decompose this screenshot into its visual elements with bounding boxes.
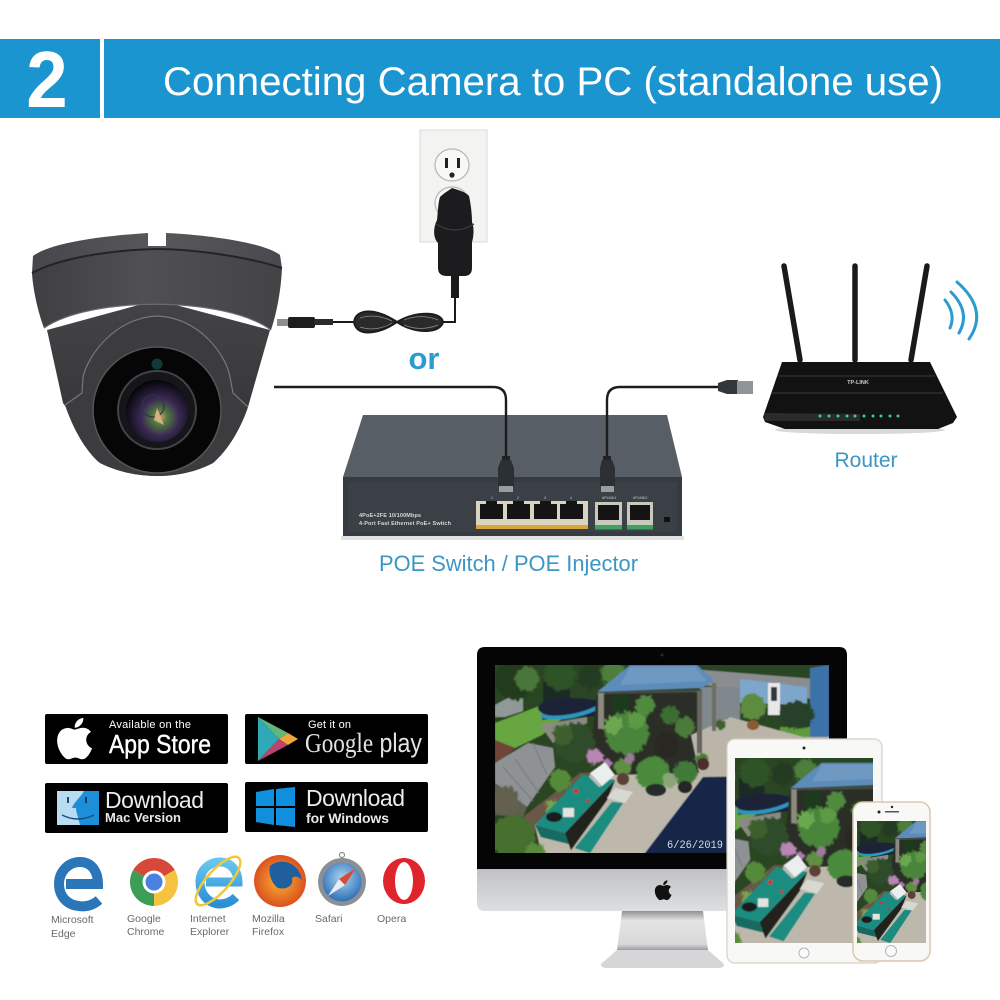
network cable to router: [600, 380, 753, 492]
status LEDs: [818, 414, 900, 418]
browser: Internet Explorer: Explorer: [190, 926, 230, 938]
badge: App Store: [45, 714, 228, 764]
browser: Safari: [315, 852, 366, 925]
title banner: [104, 39, 1000, 118]
browser: Opera: Opera: [377, 913, 406, 925]
browser: Opera: [377, 858, 425, 925]
network cable to camera: [274, 387, 514, 492]
phone screen: camera view: [857, 821, 926, 943]
browser: Internet Explorer: Internet: [190, 913, 226, 925]
badge: Download for Windows: [245, 782, 428, 832]
ethernet ports: UPLINK1: [602, 496, 616, 500]
tablet screen: camera view: [735, 758, 873, 943]
date stamp: 6/26/2019: [667, 840, 723, 852]
browser: Internet Explorer: [189, 851, 247, 938]
browser: Microsoft Edge: Edge: [51, 928, 76, 940]
dome camera: [32, 233, 282, 476]
browser: Microsoft Edge: [51, 862, 99, 940]
badge: Download Mac Version: [45, 783, 228, 833]
browser: Google Chrome: Chrome: [127, 926, 165, 938]
badge: App Store: App Store: [109, 729, 211, 759]
wall outlet: [420, 130, 487, 242]
router: TP-LINK: [847, 380, 869, 386]
POE switch: [341, 415, 684, 540]
icon: windows: [256, 787, 295, 827]
browser: Microsoft Edge: Microsoft: [51, 914, 94, 926]
switch label text: 4PoE+2FE 10/100Mbps: [359, 513, 421, 519]
badge: Google Play: Get it on: [308, 719, 351, 731]
browser: Google Chrome: Google: [127, 913, 161, 925]
power adapter and cable: [277, 188, 474, 332]
router: [763, 266, 957, 434]
tablet: [688, 739, 1000, 963]
header bar: [0, 36, 1000, 125]
POE label: POE Switch / POE Injector: [379, 551, 638, 576]
browser: Google Chrome: [127, 858, 178, 938]
badge: Download for Windows: Download: [306, 785, 405, 811]
badge: Download for Windows: for Windows: [306, 810, 389, 826]
step number box: [0, 36, 100, 125]
smartphone: [825, 802, 1000, 961]
switch label text: [359, 513, 452, 527]
badge: Google Play: Google play: [305, 728, 422, 758]
switch label text: 4-Port Fast Ethernet PoE+ Switch: [359, 521, 452, 527]
browser: Safari: Safari: [315, 913, 342, 925]
router label: Router: [834, 449, 898, 472]
ethernet ports: 1: [491, 496, 493, 500]
badge: Download Mac Version: Download: [105, 787, 204, 813]
desktop monitor: [477, 647, 847, 968]
ethernet ports: 3: [544, 496, 546, 500]
ethernet ports: 2: [517, 496, 519, 500]
badge: App Store: Available on the: [109, 719, 191, 731]
browser: Mozilla Firefox: Mozilla: [252, 913, 285, 925]
browser: Mozilla Firefox: Firefox: [252, 926, 285, 938]
ethernet ports: UPLINK2: [633, 496, 647, 500]
icon: wifi waves: [945, 282, 977, 339]
icon: mac finder: [57, 791, 99, 825]
"or" label: or: [408, 341, 440, 376]
badge: Google Play: [245, 714, 428, 764]
icon: apple logo: [655, 880, 672, 900]
badge: Download Mac Version: Mac Version: [105, 810, 181, 825]
monitor screen: camera view: [495, 665, 829, 853]
ethernet ports: 4: [570, 496, 572, 500]
browser: Mozilla Firefox: [252, 855, 306, 938]
ethernet ports: [476, 496, 670, 530]
title banner: Connecting Camera to PC (standalone use): [163, 60, 943, 104]
step number box: 2: [26, 36, 68, 125]
